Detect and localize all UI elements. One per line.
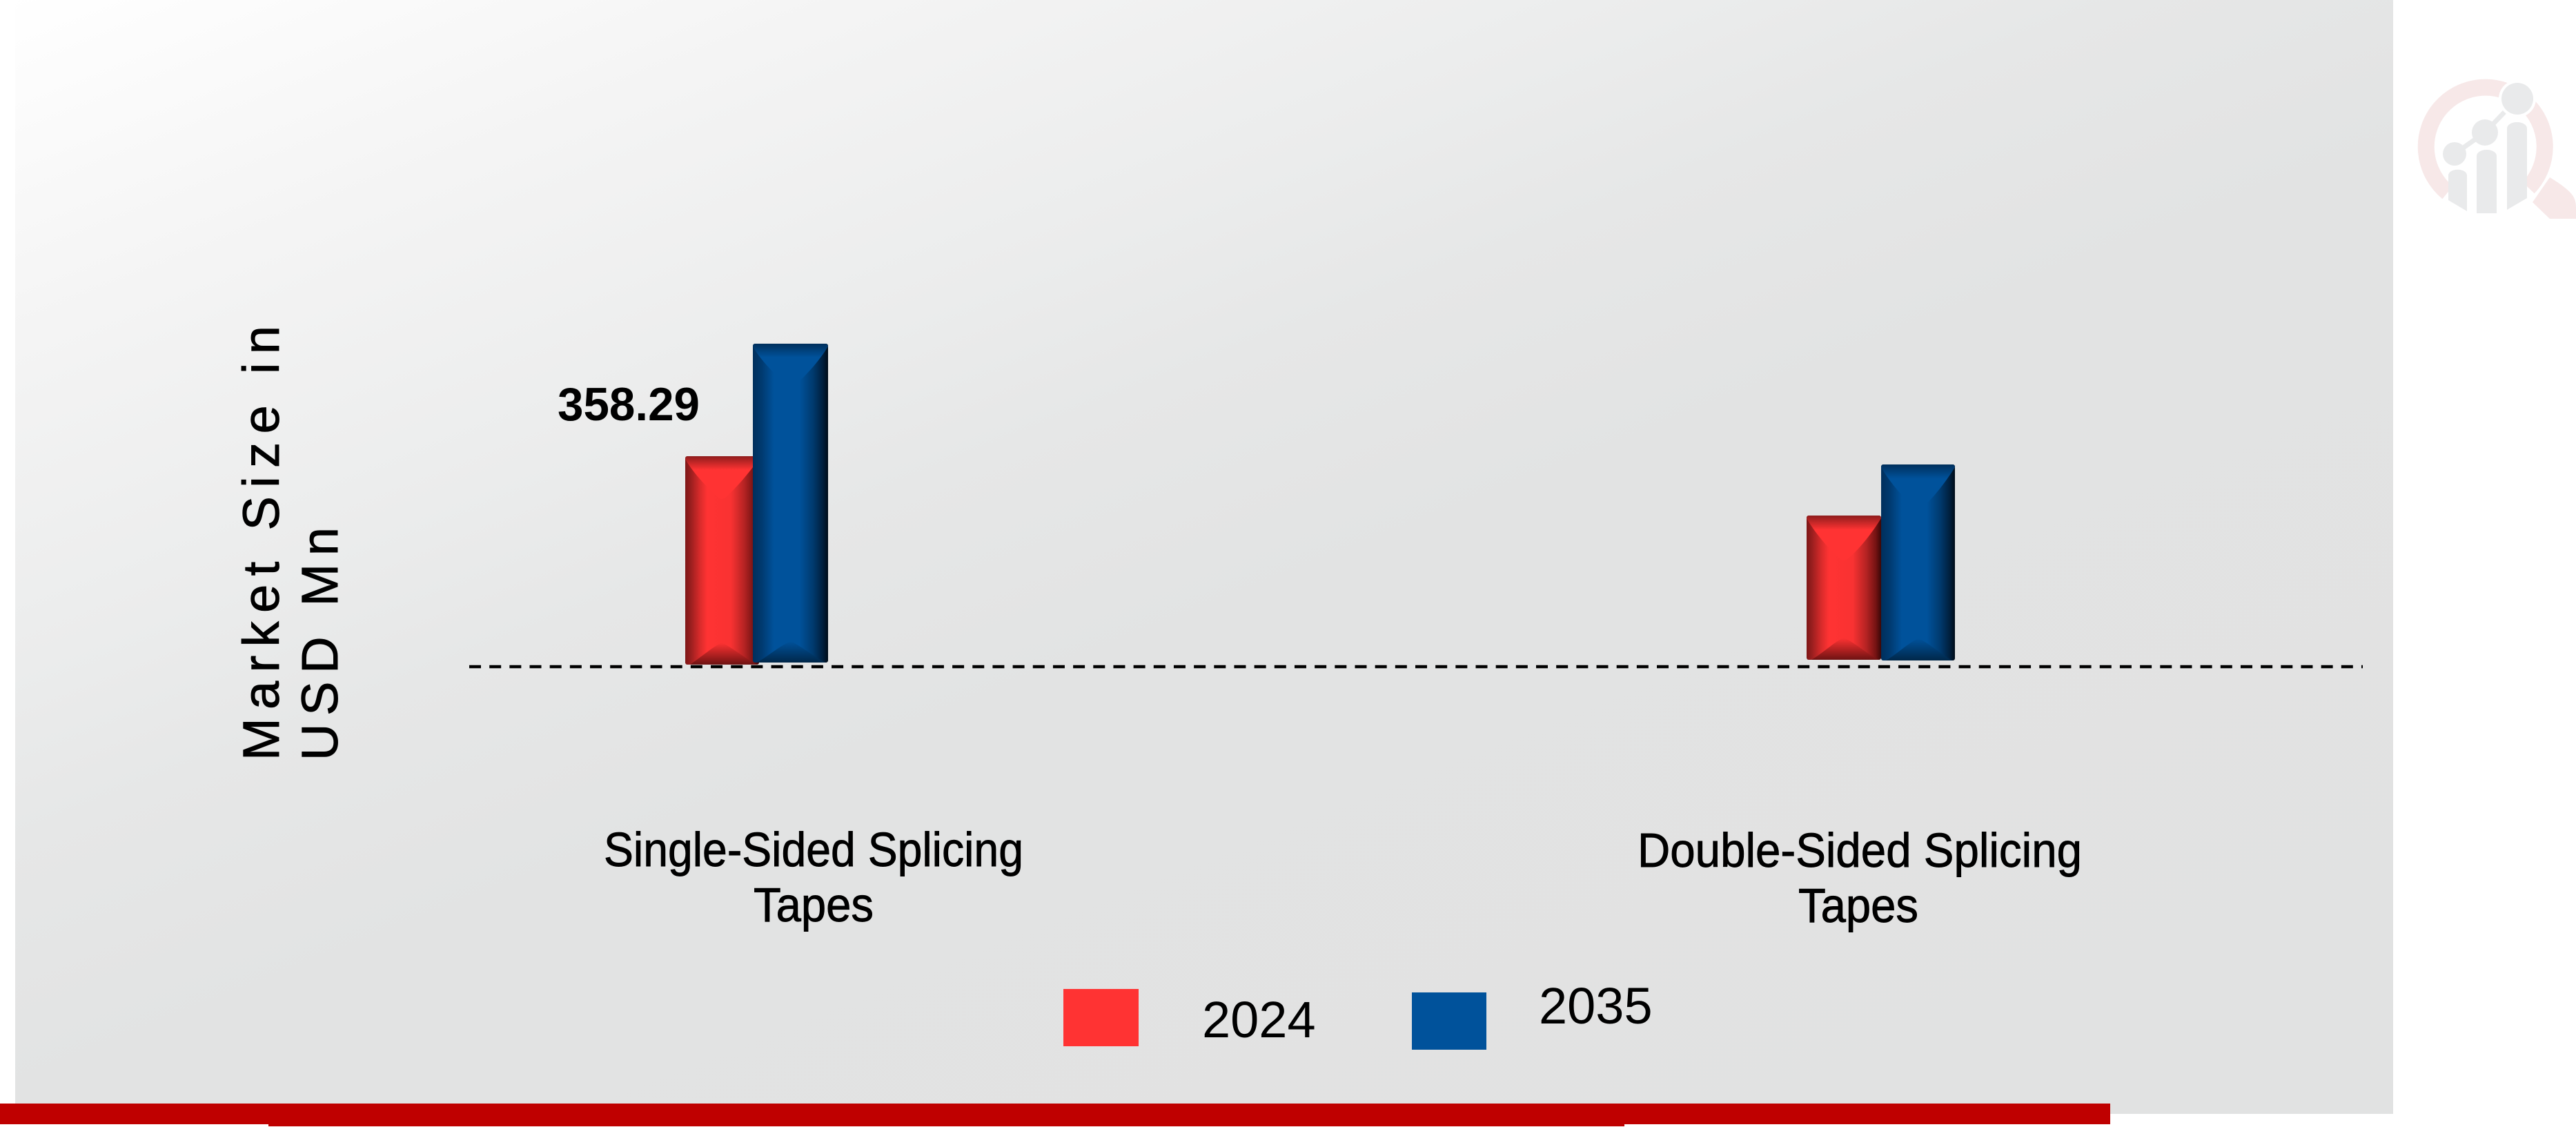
category label: Single-Sided Splicing Tapes <box>604 823 1023 932</box>
legend label: 2035: 2035 <box>1539 977 1653 1035</box>
icon: watermark logo <box>2426 80 2576 219</box>
category label: Single-Sided Splicing Tapes: Single-Sided Splicing <box>604 823 1023 876</box>
legend swatch: 2024 <box>1063 989 1139 1046</box>
bar: Double-Sided 2024 <box>1807 516 1881 660</box>
legend swatch: 2035 <box>1412 992 1486 1050</box>
y-axis title <box>233 326 348 761</box>
bar: Single-Sided 2024 <box>685 456 759 665</box>
bar group: Single-Sided Splicing Tapes <box>558 344 828 665</box>
value label: 358.29 <box>558 378 700 431</box>
bar: Single-Sided 2035 <box>753 344 828 663</box>
legend label: 2024: 2024 <box>1202 991 1316 1048</box>
category label: Double-Sided Splicing Tapes <box>1638 823 2082 932</box>
bar group: Double-Sided Splicing Tapes <box>1807 464 1955 660</box>
baseline: dashed axis <box>469 665 2363 668</box>
legend <box>1063 977 1653 1050</box>
footer bar <box>0 1104 2110 1126</box>
category label: Single-Sided Splicing Tapes: Tapes <box>754 878 874 932</box>
category label: Double-Sided Splicing Tapes: Double-Sided Splicing <box>1638 823 2082 877</box>
y-axis title: Market Size in <box>233 326 290 761</box>
y-axis title: USD Mn <box>291 527 348 761</box>
category label: Double-Sided Splicing Tapes: Tapes <box>1798 879 1918 932</box>
bar: Double-Sided 2035 <box>1881 464 1955 660</box>
